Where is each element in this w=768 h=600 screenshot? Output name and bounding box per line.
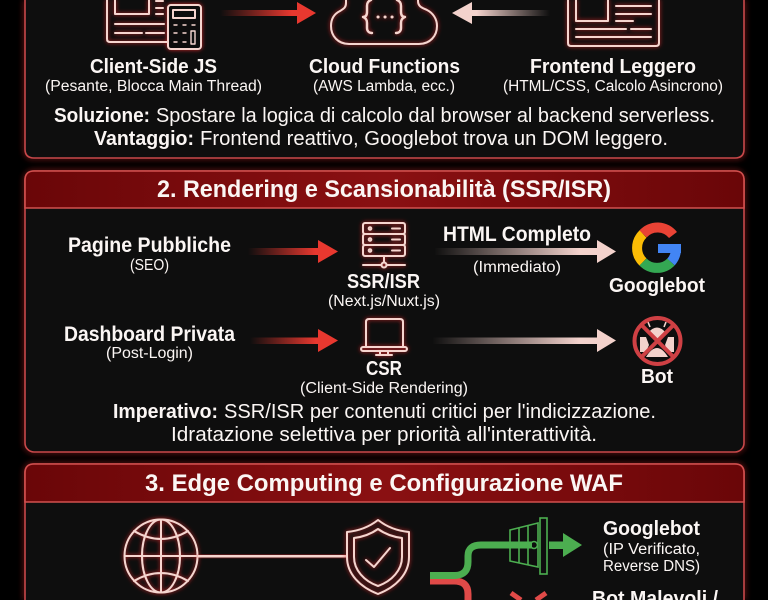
- panel 1: calcolo serverless: [25, 0, 744, 158]
- arrow: dashboard to csr: [250, 329, 338, 352]
- arrow: client to cloud: [220, 2, 316, 24]
- label: googlebot verified: Reverse DNS): [603, 558, 700, 575]
- label: pagine pubbliche: [68, 234, 231, 274]
- label: cloud functions: [309, 56, 460, 95]
- label: frontend leggero: Frontend Leggero: [530, 56, 696, 78]
- line: globe to shield: [198, 555, 347, 558]
- label: cloud functions: Cloud Functions: [309, 56, 460, 78]
- label: client-side js: [45, 56, 262, 95]
- icon: globe: [124, 520, 198, 592]
- text: soluzione e vantaggio: [54, 105, 715, 150]
- label: pagine pubbliche: (SEO): [130, 257, 169, 274]
- arrow: csr to bot: [432, 329, 616, 352]
- label: ssr/isr: (Next.js/Nuxt.js): [328, 293, 440, 310]
- icon: google logo: [637, 227, 681, 268]
- text: soluzione e vantaggio: Vantaggio:: [94, 128, 194, 150]
- label: ssr/isr: [328, 271, 440, 310]
- line: blocked red route: [430, 581, 468, 600]
- label: frontend leggero: [503, 56, 723, 95]
- text: soluzione e vantaggio: Soluzione:: [54, 105, 150, 127]
- label: html completo: HTML Completo: [443, 223, 591, 246]
- icon: blocked bot: [634, 318, 680, 364]
- icon: shield: [347, 520, 409, 594]
- text: imperativo: [113, 401, 656, 446]
- label: dashboard privata: [64, 323, 235, 362]
- label: googlebot: Googlebot: [609, 275, 705, 297]
- label: csr: CSR: [366, 358, 402, 380]
- label: pagine pubbliche: Pagine Pubbliche: [68, 234, 231, 257]
- icon: laptop: [361, 319, 407, 355]
- label: client-side js: Client-Side JS: [90, 56, 217, 78]
- icon: client document with calculator: [107, 0, 201, 49]
- label: csr: [300, 358, 468, 397]
- label: googlebot verified: [603, 518, 700, 575]
- arrow: green to googlebot: [549, 533, 582, 557]
- panel 2 header: [25, 171, 744, 208]
- label: cloud functions: (AWS Lambda, ecc.): [313, 78, 455, 95]
- panel 3 header: 3. Edge Computing e Configurazione WAF: [145, 470, 623, 497]
- label: ssr/isr: SSR/ISR: [347, 271, 420, 293]
- icon: frontend document: [568, 0, 659, 46]
- icon: server: [363, 223, 405, 268]
- icon: cloud functions: [331, 0, 437, 44]
- text: imperativo: SSR/ISR per contenuti critici per l'indicizzazione.: [224, 401, 656, 423]
- panel 3: edge computing: [25, 464, 744, 600]
- panel 3 header: [25, 464, 744, 502]
- text: soluzione e vantaggio: Spostare la logica di calcolo dal browser al backend serverless.: [156, 105, 715, 127]
- arrow: pagine to ssr: [248, 240, 338, 263]
- label: googlebot verified: Googlebot: [603, 518, 700, 540]
- label: bot: Bot: [641, 366, 673, 388]
- panel 2 header: 2. Rendering e Scansionabilità (SSR/ISR): [157, 176, 611, 203]
- text: imperativo: Imperativo:: [113, 401, 218, 423]
- line: allowed green route: [430, 545, 532, 576]
- label: googlebot verified: (IP Verificato,: [603, 541, 700, 558]
- icon: red cross: [511, 593, 546, 600]
- label: dashboard privata: (Post-Login): [106, 345, 193, 362]
- arrow: ssr to googlebot: [434, 240, 616, 263]
- label: client-side js: (Pesante, Blocca Main Thread): [45, 78, 262, 95]
- panel 2: rendering: [25, 171, 744, 452]
- label: dashboard privata: Dashboard Privata: [64, 323, 235, 346]
- arrow: frontend to cloud: [452, 2, 550, 24]
- label: frontend leggero: (HTML/CSS, Calcolo Asincrono): [503, 78, 723, 95]
- text: imperativo: Idratazione selettiva per priorità all'interattività.: [171, 424, 597, 446]
- label: csr: (Client-Side Rendering): [300, 380, 468, 397]
- text: soluzione e vantaggio: Frontend reattivo, Googlebot trova un DOM leggero.: [200, 128, 668, 150]
- label: immediato: (Immediato): [473, 259, 561, 276]
- icon: firewall filter: [510, 518, 547, 574]
